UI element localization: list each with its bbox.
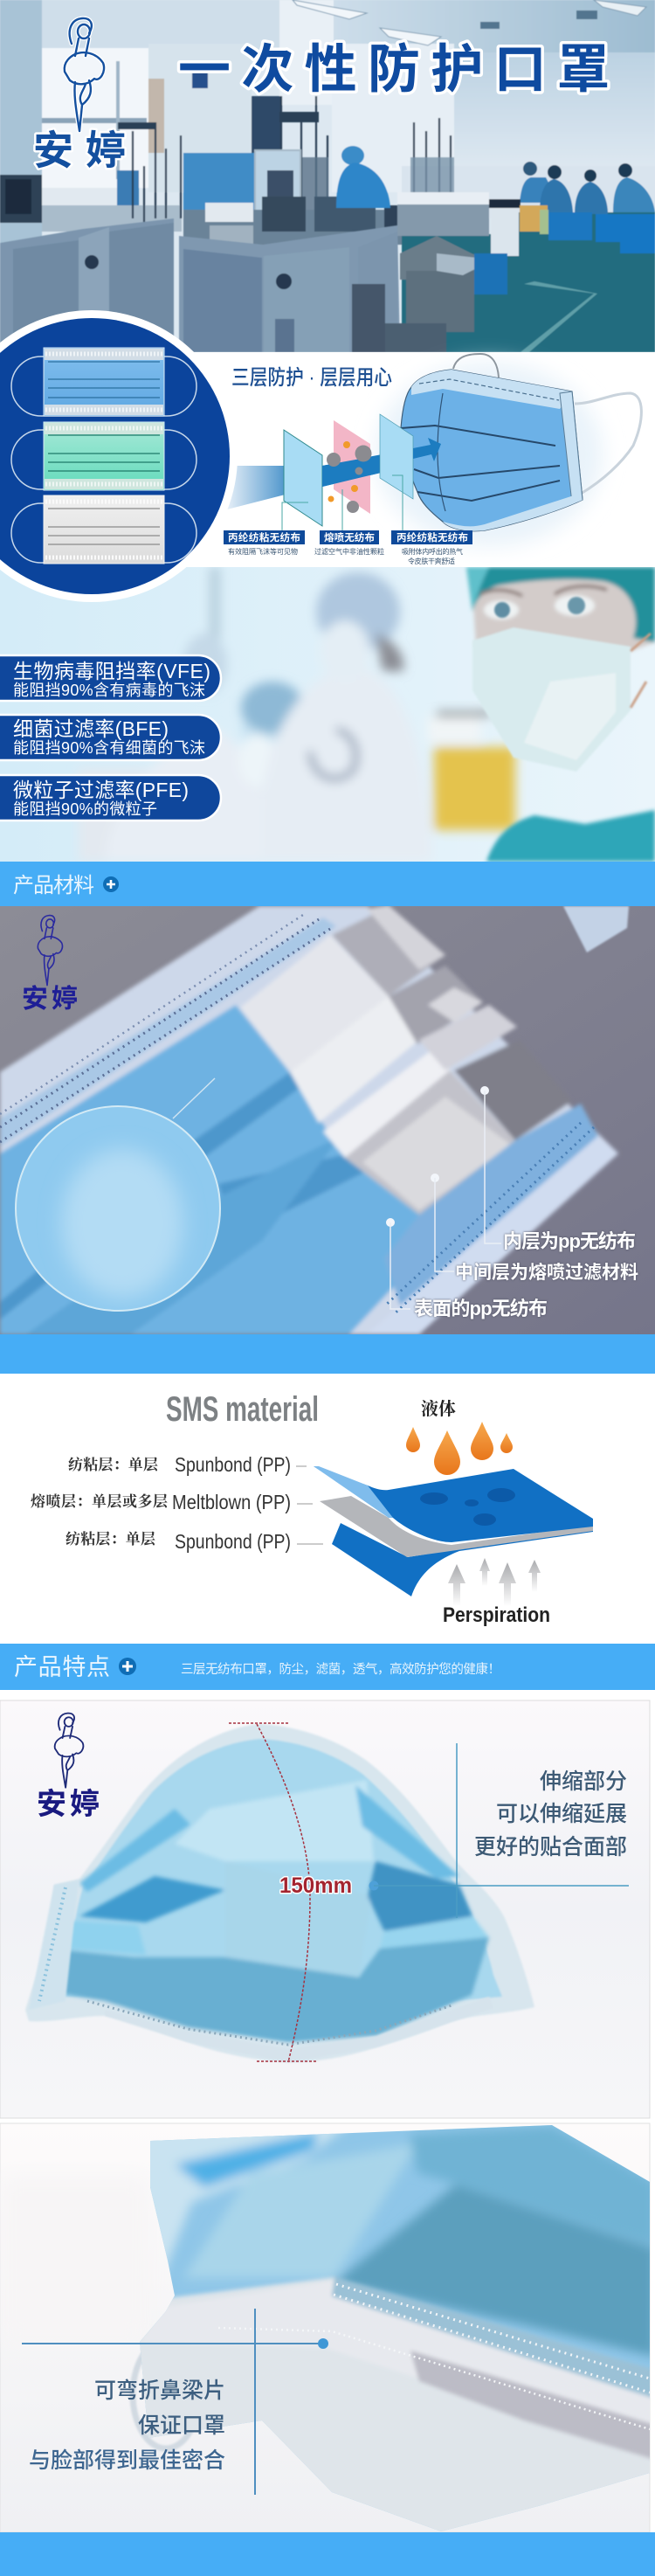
section header: product material <box>0 862 655 906</box>
label: top spunbond <box>68 1453 291 1476</box>
mask: white <box>11 495 196 564</box>
photo background <box>0 567 655 862</box>
photo of mask layers <box>0 905 655 1334</box>
label: meltblown: 熔喷层：单层或多层 <box>30 1492 169 1510</box>
left counter and machine <box>41 188 118 206</box>
callout: nose bridge: 与脸部得到最佳密合 <box>29 2448 225 2473</box>
callout: middle layer <box>431 1174 638 1283</box>
section header: product material: 产品材料 <box>13 874 94 897</box>
label: meltblown: Meltblown (PP) <box>172 1491 291 1513</box>
title: 一次性防护口罩 <box>178 40 610 99</box>
panel: medical staff photo with filtration ratings <box>0 567 655 862</box>
dimension: 150mm <box>229 1723 352 2062</box>
leader lines <box>282 475 403 530</box>
logo text: 安婷 <box>33 128 126 173</box>
left cabinets <box>0 218 174 352</box>
pill: BFE: 细菌过滤率(BFE) <box>13 717 169 740</box>
centre worker <box>341 146 364 165</box>
label: meltblown: 过滤空气中非油性颗粒 <box>314 547 384 556</box>
blue footer band <box>0 2532 655 2576</box>
illustration: airflow through layers <box>227 414 441 530</box>
dimension: 150mm: 150mm <box>279 1873 352 1898</box>
label: meltblown <box>314 530 384 556</box>
logo text: 安婷 <box>22 985 78 1014</box>
layer 3 <box>380 414 413 499</box>
panel: three-layer protection <box>0 352 655 567</box>
pill: PFE <box>0 775 221 821</box>
factory photo background <box>0 0 655 352</box>
callout: outer layer: 表面的pp无纺布 <box>414 1298 548 1319</box>
logo: ballerina <box>65 18 104 131</box>
callout: nose bridge: 可弯折鼻梁片 <box>94 2379 225 2403</box>
label: perspiration: Perspiration <box>443 1603 550 1627</box>
label: bottom spunbond <box>66 1530 291 1553</box>
panel: nose bridge feature <box>0 2123 655 2543</box>
panel: SMS material diagram <box>0 1374 655 1644</box>
section header: product features <box>0 1644 655 1690</box>
pill: BFE <box>0 715 221 760</box>
group of workers <box>519 177 548 203</box>
callout: stretch part: 更好的贴合面部 <box>474 1835 627 1859</box>
panel: mask colour options circle <box>0 310 238 602</box>
label: bottom spunbond: 纺粘层：单层 <box>66 1531 156 1548</box>
section header: product features: 三层无纺布口罩，防尘，滤菌，透气，高效防护您的健康！ <box>181 1662 500 1677</box>
photo: side of mask <box>0 2123 655 2543</box>
icon: perspiration arrows <box>448 1558 541 1606</box>
icon: plus <box>103 876 119 892</box>
pill: VFE <box>0 655 221 701</box>
hero banner: factory photo with title <box>0 0 655 352</box>
mask: blue <box>11 348 196 416</box>
layer 2 pink <box>334 420 370 514</box>
label: bottom spunbond: Spunbond (PP) <box>175 1530 291 1553</box>
photo: front of mask <box>25 1724 534 2062</box>
magnifier <box>16 1078 220 1311</box>
pill: PFE: 能阻挡90%的微粒子 <box>13 800 157 818</box>
pill: VFE: 能阻挡90%含有病毒的飞沫 <box>13 682 205 699</box>
label: meltblown: 熔喷无纺布 <box>324 531 375 544</box>
heading: SMS material: SMS material <box>166 1390 319 1429</box>
callout: middle layer: 中间层为熔喷过滤材料 <box>455 1263 638 1283</box>
section header: product features: 产品特点 <box>14 1654 110 1680</box>
label: meltblown <box>30 1491 291 1513</box>
nurse <box>486 810 655 862</box>
blue surface <box>0 1005 437 1334</box>
callout: nose bridge: 保证口罩 <box>138 2413 225 2438</box>
blue curtains <box>183 153 255 214</box>
fabric layers <box>240 935 389 1072</box>
label: spunbond 2 <box>391 530 472 565</box>
cardboard boxes <box>399 236 475 280</box>
panel: stretch feature <box>0 1690 655 2123</box>
callout: inner layer: 内层为pp无纺布 <box>503 1230 636 1252</box>
label: liquid: 液体 <box>421 1399 456 1419</box>
particles <box>327 441 372 513</box>
label: spunbond 2: 吸附体内呼出的热气 <box>402 547 463 556</box>
heading: three-layer: 三层防护 · 层层用心 <box>231 366 392 390</box>
diagram: layered sheets <box>296 1466 593 1596</box>
label: spunbond 1: 丙纶纺粘无纺布 <box>228 531 300 544</box>
floor <box>401 233 516 352</box>
machinery towers <box>131 96 452 222</box>
icon: droplets <box>406 1422 513 1475</box>
icon: plus <box>119 1658 136 1675</box>
upper binding <box>0 906 618 1334</box>
callout: stretch part: 伸缩部分 <box>540 1769 627 1794</box>
logo: ballerina <box>55 1714 83 1788</box>
label: spunbond 1 <box>224 530 305 556</box>
stitching <box>0 919 330 1142</box>
pill: BFE: 能阻挡90%含有细菌的飞沫 <box>13 739 205 757</box>
panel: mask material photo <box>0 905 655 1334</box>
bins <box>548 212 592 240</box>
label: top spunbond: 纺粘层：单层 <box>68 1457 159 1473</box>
logo text: 安婷 <box>37 1788 100 1821</box>
label: spunbond 2: 令皮肤干爽舒适 <box>408 557 455 565</box>
callout: inner layer <box>480 1086 636 1252</box>
illustration: large mask <box>376 354 641 546</box>
centre cabinets <box>179 225 400 352</box>
logo: small ballerina <box>38 916 62 986</box>
layer 1 <box>284 430 322 526</box>
callout: stretch part: 可以伸缩延展 <box>496 1802 627 1826</box>
mask: green <box>11 422 196 490</box>
callout: nose bridge <box>22 2309 328 2495</box>
callout: stretch part <box>369 1743 629 1918</box>
right blue strip <box>384 1104 598 1311</box>
pill: PFE: 微粒子过滤率(PFE) <box>13 779 189 801</box>
label: spunbond 1: 有效阻隔飞沫等可见物 <box>228 547 298 556</box>
callout: outer layer <box>386 1218 548 1319</box>
label: spunbond 2: 丙纶纺粘无纺布 <box>396 531 468 544</box>
pill: VFE: 生物病毒阻挡率(VFE) <box>13 660 210 682</box>
label: top spunbond: Spunbond (PP) <box>175 1453 291 1476</box>
blue spacer band <box>0 1334 655 1374</box>
